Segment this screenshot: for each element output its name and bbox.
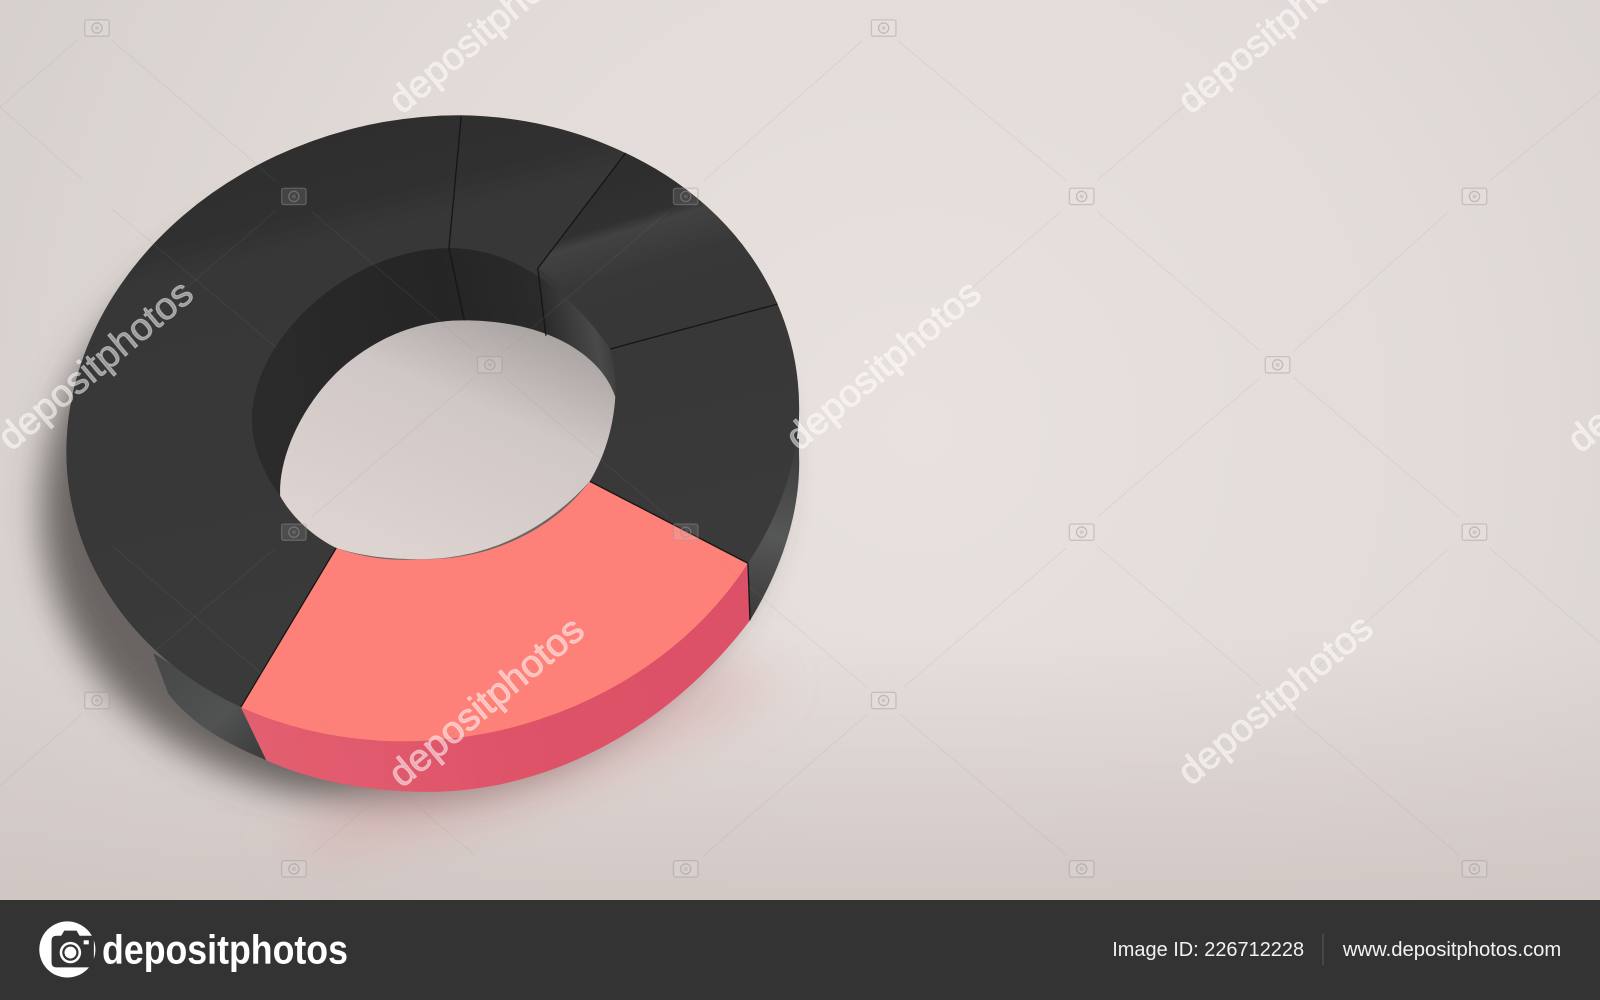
inner wall of the hole xyxy=(252,248,616,496)
watermark text xyxy=(0,0,1600,795)
website url: www.depositphotos.com xyxy=(1342,939,1561,961)
chart shadow xyxy=(0,104,836,886)
watermark text: depositphotos xyxy=(380,608,592,795)
watermark text: depositphotos xyxy=(1169,606,1380,793)
watermark icons: camera grid xyxy=(85,20,1487,877)
footer bar xyxy=(0,900,1600,1000)
watermark text: depositphotos xyxy=(777,271,989,458)
segment dividers xyxy=(241,116,778,707)
top face: dark ring xyxy=(66,115,799,707)
centre opening xyxy=(280,320,615,559)
side wall: red segment xyxy=(241,563,750,792)
donut chart xyxy=(66,115,799,792)
icon: camera logo xyxy=(39,921,95,978)
image id: Image ID: 226712228 xyxy=(1112,939,1304,961)
top face: highlighted red segment xyxy=(241,481,748,741)
top face: glossy dark segment xyxy=(538,153,778,349)
side wall: right dark segment xyxy=(714,439,799,620)
logo wordmark: depositphotos xyxy=(102,926,348,972)
side wall: left dark segment xyxy=(153,653,266,760)
